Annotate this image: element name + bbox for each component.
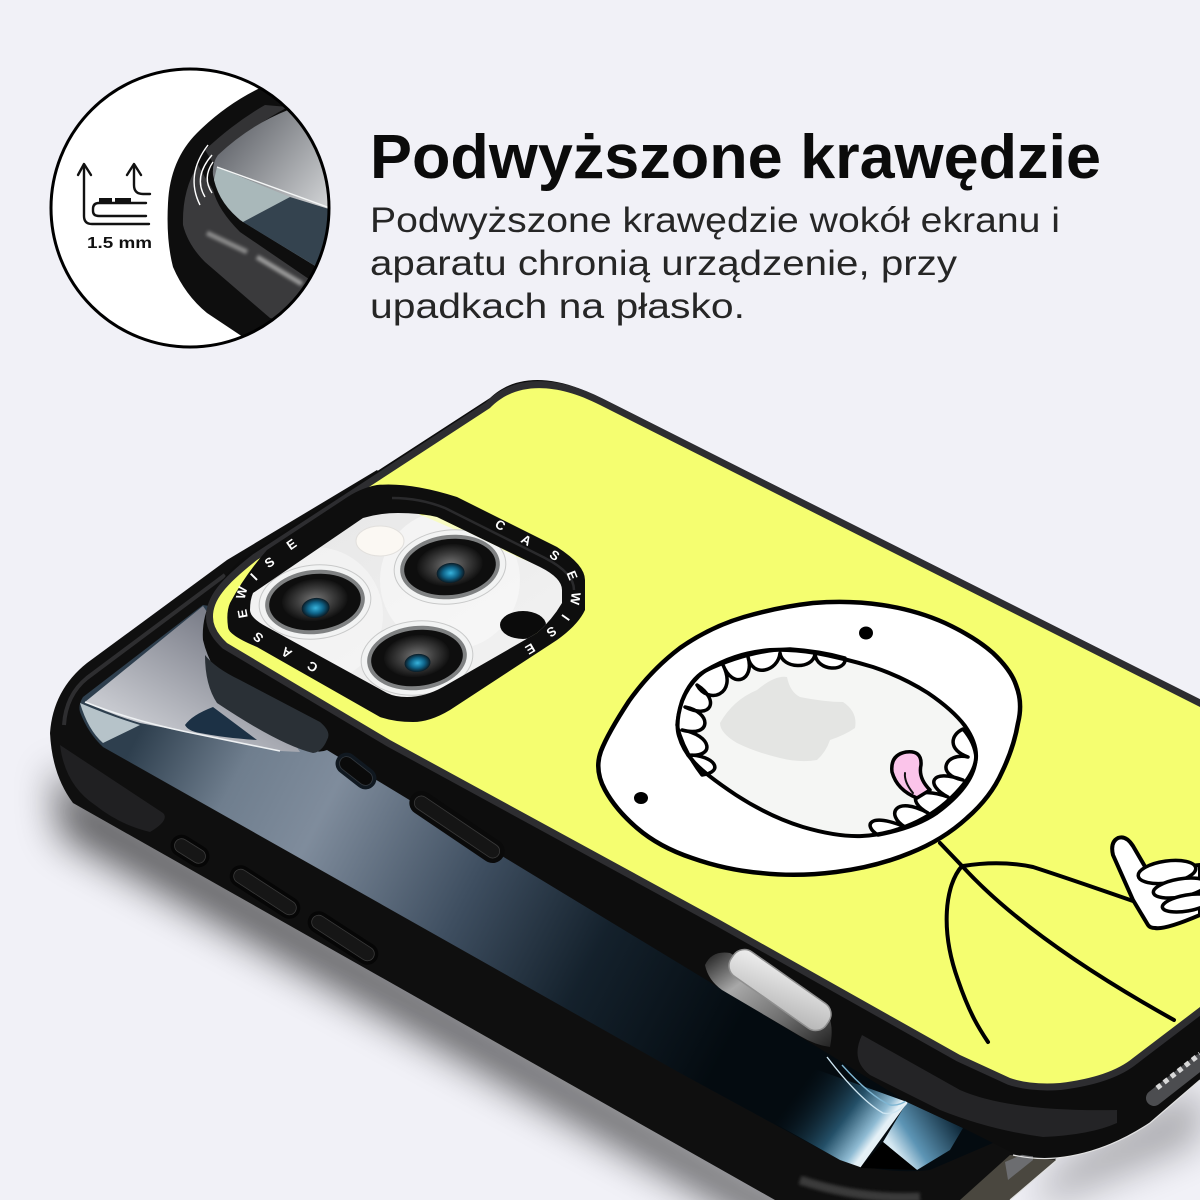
upper phone frame xyxy=(203,380,1200,1158)
inset frame xyxy=(168,88,315,336)
lens 2 xyxy=(394,529,506,605)
raised glass plateaus xyxy=(247,510,546,701)
lower phone bottom highlight xyxy=(800,1180,920,1197)
lens 3 xyxy=(360,620,474,696)
lower phone bottom right strip xyxy=(960,1155,1057,1200)
camera glass xyxy=(240,505,570,710)
ring brand text: S xyxy=(262,553,278,571)
screen dark blob xyxy=(185,707,257,740)
ring brand text xyxy=(233,516,584,676)
bottom rim highlight xyxy=(1027,1094,1087,1100)
inset grey band xyxy=(183,165,308,318)
description text: Podwyższone krawędzie wokół ekranu i xyxy=(370,201,1060,240)
description text xyxy=(370,201,1060,326)
ring brand text: E xyxy=(284,535,300,553)
lens 1 xyxy=(258,564,372,640)
screen light wedge xyxy=(80,703,140,743)
charging port xyxy=(705,944,836,1047)
ring brand text: S xyxy=(543,623,559,641)
lower phone corner panel xyxy=(60,745,165,832)
upper phone case xyxy=(203,380,1200,1159)
tongue xyxy=(892,752,930,798)
ring brand text: I xyxy=(559,612,573,623)
inset upper band xyxy=(205,105,288,163)
lower teeth xyxy=(870,729,976,835)
inset background xyxy=(51,69,329,347)
lower phone: back frame and screen xyxy=(50,470,1057,1200)
eye: upper xyxy=(859,626,873,640)
corner rays xyxy=(760,1057,963,1170)
label: 1.5 mm: 1.5 mm xyxy=(87,235,152,252)
lidar xyxy=(500,611,546,639)
eye: lower xyxy=(634,792,648,804)
ring brand text: E xyxy=(522,640,538,658)
upper teeth xyxy=(677,649,845,775)
lower phone port xyxy=(1005,1150,1033,1180)
lower phone frame xyxy=(50,470,1057,1200)
speaker grille xyxy=(1154,1054,1200,1098)
ring brand text: W xyxy=(567,592,584,606)
screen white curve xyxy=(85,702,280,751)
inset phone corner xyxy=(168,88,328,336)
yellow back panel xyxy=(213,388,1200,1083)
bottom corner panel xyxy=(858,1035,1117,1137)
inset screen xyxy=(212,110,328,266)
thumbs-up hand xyxy=(1112,837,1200,928)
inset circle: raised edge close-up xyxy=(51,69,345,347)
lower phone frame inner line xyxy=(64,575,225,725)
ring brand text: W xyxy=(233,584,251,601)
button: volume down xyxy=(303,907,383,969)
upper phone corner translucent panel xyxy=(205,655,328,753)
description text: aparatu chronią urządzenie, przy xyxy=(370,244,958,283)
camera ring xyxy=(227,484,585,722)
mouth interior xyxy=(678,650,976,836)
inset arcs xyxy=(194,145,213,205)
ring brand text: S xyxy=(250,629,266,646)
stick body xyxy=(940,843,1174,1020)
title: Podwyższone krawędzie xyxy=(370,123,1101,192)
flash xyxy=(356,526,404,556)
button: action xyxy=(166,831,214,871)
ring brand text: A xyxy=(518,531,535,549)
shark character illustration xyxy=(598,602,1200,1042)
ring brand text: I xyxy=(247,570,260,583)
icon: raised edge diagram xyxy=(78,164,150,224)
head xyxy=(598,602,1020,875)
screen grey reflection xyxy=(85,606,300,752)
ring brand text: C xyxy=(304,658,321,676)
drop shadows xyxy=(55,770,1200,1200)
inset dark wedge xyxy=(243,197,328,266)
mouth outline xyxy=(678,650,976,836)
button: silent switch xyxy=(331,748,381,794)
inset stripe highlights xyxy=(207,233,247,252)
ring brand text: S xyxy=(547,547,563,564)
stick right arm xyxy=(963,863,1133,901)
camera module xyxy=(227,484,585,722)
bottom white edge xyxy=(1013,1080,1200,1159)
ring brand text: A xyxy=(278,644,295,662)
ring brand text: C xyxy=(492,516,509,534)
button: power xyxy=(405,786,509,868)
ring inner bevel xyxy=(392,498,574,590)
ring brand text: E xyxy=(234,608,251,619)
stick left arm xyxy=(947,866,988,1042)
inset ring xyxy=(51,69,329,347)
lower phone rim line xyxy=(1010,1160,1057,1200)
ring brand text: E xyxy=(564,568,581,582)
apple logo showing through xyxy=(720,677,856,761)
description text: upadkach na płasko. xyxy=(370,287,745,326)
lower phone screen xyxy=(79,605,1000,1171)
button: volume up xyxy=(225,861,305,923)
inset white line xyxy=(217,167,330,208)
inset light wedge xyxy=(214,167,290,222)
yellow back panel rim xyxy=(213,388,1200,1083)
